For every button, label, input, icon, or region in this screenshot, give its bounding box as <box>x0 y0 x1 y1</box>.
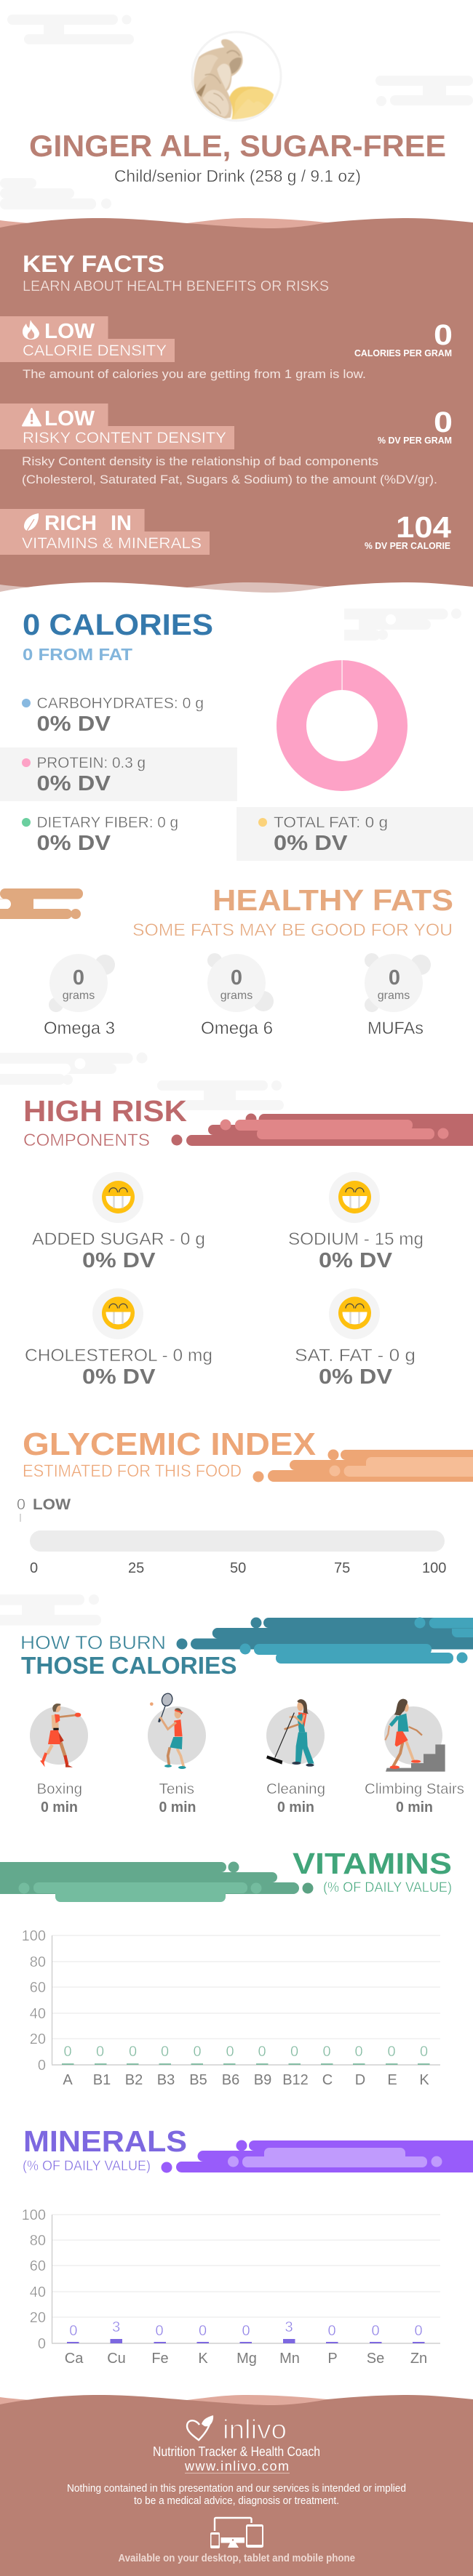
fact: calorie density: LOW <box>44 320 95 343</box>
icon: inlivo heart logo <box>187 2415 213 2440</box>
food photo: ginger root <box>192 32 281 121</box>
bar chart: vitamins: 0 <box>258 2044 266 2060</box>
nutrient: dietary fiber: 0% DV <box>36 832 111 855</box>
bar chart: vitamins: B6 <box>222 2072 239 2088</box>
risk: sodium: SODIUM - 15 mg <box>288 1229 424 1249</box>
risk: added sugar <box>32 1172 205 1272</box>
fact: risky content density <box>0 404 453 486</box>
bar chart: vitamins: 0 <box>226 2044 234 2060</box>
website link: www.inlivo.com <box>184 2459 289 2473</box>
heading: key facts: KEY FACTS <box>23 251 164 277</box>
decorative cloud: burn <box>0 1594 101 1626</box>
bar chart: minerals: 0 <box>327 2323 336 2339</box>
bar chart: vitamins: 0 <box>290 2044 298 2060</box>
risk: cholesterol <box>25 1288 212 1389</box>
fact: calorie density: CALORIES PER GRAM <box>354 348 452 358</box>
disclaimer: Nothing contained in this presentation and our services is intended or implied <box>67 2482 406 2495</box>
risk: saturated fat: SAT. FAT - 0 g <box>295 1346 416 1365</box>
bar chart: vitamins: B1 <box>93 2072 111 2088</box>
activity: climbing stairs: 0 min <box>396 1799 433 1815</box>
disclaimer <box>67 2482 406 2507</box>
fact: rich in vitamins and minerals: 104 <box>396 510 451 544</box>
bar chart: vitamins: 100 <box>22 1928 46 1944</box>
bar chart: vitamins: 0 <box>161 2044 169 2060</box>
illustration: person climbing stairs <box>385 1699 445 1772</box>
bar chart: vitamins: B5 <box>189 2072 207 2088</box>
bar chart: minerals <box>22 2207 440 2367</box>
fact: calorie density: CALORIE DENSITY <box>23 342 167 359</box>
fact: risky content density: RISKY CONTENT DENSITY <box>23 430 226 446</box>
heading: those calories: THOSE CALORIES <box>21 1652 237 1679</box>
nutrient: protein: 0% DV <box>36 772 111 795</box>
tagline: Nutrition Tracker & Health Coach <box>153 2444 320 2459</box>
bar chart: vitamins: B9 <box>254 2072 271 2088</box>
fat: omega 3 <box>44 954 115 1038</box>
bar chart: vitamins: 40 <box>30 2006 46 2022</box>
fat: omega 3: grams <box>63 990 95 1002</box>
bar chart: vitamins: B2 <box>125 2072 143 2088</box>
activity: tennis: 0 min <box>159 1799 196 1815</box>
fact: rich in vitamins and minerals: RICH <box>44 512 97 535</box>
icon: leaf <box>24 513 39 531</box>
decorative bars: minerals <box>162 2140 473 2172</box>
activity: cleaning: Cleaning <box>266 1781 325 1797</box>
title: GINGER ALE, SUGAR-FREE <box>29 129 446 163</box>
icon: smiley <box>338 1297 371 1329</box>
activity: cleaning <box>266 1699 325 1815</box>
fact: rich in vitamins and minerals: % DV PER CALORIE <box>365 540 450 551</box>
bar chart: minerals: Zn <box>410 2351 427 2367</box>
bar chart: vitamins: C <box>322 2072 333 2088</box>
subheading: components: COMPONENTS <box>23 1131 150 1150</box>
glycemic gauge: 25 <box>128 1560 144 1576</box>
bar chart: vitamins: 0 <box>63 2044 72 2060</box>
nutrient: protein: PROTEIN: 0.3 g <box>36 755 146 771</box>
activity: boxing: Boxing <box>36 1781 82 1797</box>
subheading: minerals: (% OF DAILY VALUE) <box>23 2159 151 2174</box>
bar chart: minerals: 0 <box>371 2323 380 2339</box>
heading: high risk: HIGH RISK <box>23 1094 187 1128</box>
fact: risky content density: Risky Content density is the relationship of bad components <box>22 454 378 468</box>
subheading: glycemic index: ESTIMATED FOR THIS FOOD <box>23 1461 242 1481</box>
heading: glycemic index: GLYCEMIC INDEX <box>23 1427 316 1462</box>
fact: rich in vitamins and minerals <box>0 509 451 555</box>
risk: sodium: 0% DV <box>319 1249 393 1272</box>
heading: minerals: MINERALS <box>23 2124 187 2158</box>
subheading: healthy fats: SOME FATS MAY BE GOOD FOR YOU <box>132 920 453 940</box>
decorative bars: high risk <box>172 1114 473 1146</box>
bar chart: vitamins: 0 <box>354 2044 363 2060</box>
decorative bars: vitamins <box>0 1861 313 1902</box>
fact: calorie density: The amount of calories you are getting from 1 gram is low. <box>23 367 366 381</box>
fat: omega 6 <box>201 953 274 1038</box>
fact: rich in vitamins and minerals: IN <box>111 512 132 535</box>
nutrient: dietary fiber <box>22 814 178 855</box>
fat: omega 3: Omega 3 <box>44 1019 115 1038</box>
illustration: boxer <box>40 1704 81 1768</box>
bar chart: minerals: Cu <box>107 2351 126 2367</box>
bar chart: minerals: Mn <box>279 2351 300 2367</box>
bar chart: minerals: 0 <box>38 2336 46 2352</box>
panel: footer <box>0 2395 473 2576</box>
bar chart: vitamins: D <box>355 2072 365 2088</box>
fat: omega 6: 0 <box>231 966 242 990</box>
bar chart: vitamins: 0 <box>129 2044 137 2060</box>
donut chart <box>291 660 393 777</box>
activity: tennis <box>148 1692 206 1815</box>
bar chart: vitamins: K <box>419 2072 429 2088</box>
bar chart: vitamins: 0 <box>96 2044 104 2060</box>
risk: cholesterol: 0% DV <box>82 1365 156 1389</box>
bar chart: minerals: 0 <box>155 2323 164 2339</box>
bar chart: minerals: Ca <box>65 2351 84 2367</box>
fact: calorie density: 0 <box>434 319 453 351</box>
activity: cleaning: 0 min <box>277 1799 314 1815</box>
decorative clouds: high risk <box>0 1053 284 1110</box>
icon: smiley <box>102 1297 135 1329</box>
fact: risky content density: 0 <box>434 406 453 438</box>
activity: climbing stairs <box>365 1699 464 1815</box>
bar chart: vitamins: 80 <box>30 1954 46 1970</box>
fat: mufas: MUFAs <box>367 1019 424 1038</box>
bar chart: vitamins: 0 <box>387 2044 396 2060</box>
bar chart: minerals: Mg <box>236 2351 257 2367</box>
bar chart: minerals: 3 <box>112 2319 120 2335</box>
bar chart: minerals: 20 <box>30 2310 46 2326</box>
fact: rich in vitamins and minerals: VITAMINS & MINERALS <box>22 535 202 552</box>
subheading: vitamins: (% OF DAILY VALUE) <box>323 1880 452 1895</box>
icon: smiley <box>338 1181 371 1213</box>
bar chart: minerals: Fe <box>151 2351 169 2367</box>
nutrient: carbohydrates: CARBOHYDRATES: 0 g <box>36 695 204 712</box>
bar chart: minerals: 40 <box>30 2284 46 2300</box>
bar chart: vitamins: B3 <box>157 2072 175 2088</box>
decorative bars: burn <box>176 1617 473 1664</box>
fact: calorie density <box>0 316 453 381</box>
activity: tennis: Tenis <box>159 1781 194 1797</box>
risk: added sugar: 0% DV <box>82 1249 156 1272</box>
glycemic gauge: LOW <box>33 1496 71 1513</box>
bar chart: minerals: 0 <box>69 2323 77 2339</box>
bar chart: vitamins: 0 <box>193 2044 202 2060</box>
heading: how to burn: HOW TO BURN <box>20 1632 166 1653</box>
header decorative clouds <box>0 15 473 209</box>
glycemic gauge: 100 <box>422 1560 446 1576</box>
bar chart: minerals: 100 <box>22 2207 46 2223</box>
nutrient: protein <box>0 747 237 801</box>
availability note: Available on your desktop, tablet and mobile phone <box>118 2552 355 2564</box>
fat: mufas: grams <box>378 990 410 1002</box>
bar chart: vitamins: 0 <box>322 2044 331 2060</box>
nutrient: carbohydrates: 0% DV <box>36 713 111 736</box>
decorative cloud: calories <box>344 609 461 641</box>
bar chart: vitamins: 20 <box>30 2031 46 2047</box>
icon: flame <box>23 320 39 340</box>
glycemic gauge <box>17 1496 446 1576</box>
nutrient: dietary fiber: DIETARY FIBER: 0 g <box>36 814 178 831</box>
decorative bars: glycemic index <box>253 1450 473 1482</box>
bar chart: minerals: Se <box>367 2351 384 2367</box>
brand name: inlivo <box>223 2415 287 2444</box>
heading: 0 calories: 0 CALORIES <box>23 608 213 641</box>
bar chart: vitamins: A <box>63 2072 73 2088</box>
glycemic gauge: 0 <box>30 1560 38 1576</box>
activity: climbing stairs: Climbing Stairs <box>365 1781 464 1797</box>
nutrient: carbohydrates <box>22 695 204 736</box>
risk: cholesterol: CHOLESTEROL - 0 mg <box>25 1346 212 1365</box>
subtitle: Child/senior Drink (258 g / 9.1 oz) <box>114 166 361 185</box>
subheading: 0 from fat: 0 FROM FAT <box>23 645 132 664</box>
decorative cloud: healthy fats <box>0 888 83 919</box>
subheading: key facts: LEARN ABOUT HEALTH BENEFITS OR RISKS <box>23 278 329 294</box>
nutrient: total fat: 0% DV <box>274 832 348 855</box>
bar chart: minerals: 0 <box>199 2323 207 2339</box>
risk: saturated fat: 0% DV <box>319 1365 393 1389</box>
bar chart: minerals: 80 <box>30 2233 46 2249</box>
bar chart: minerals: K <box>198 2351 208 2367</box>
bar chart: vitamins: 60 <box>30 1980 46 1996</box>
risk: saturated fat <box>295 1288 416 1389</box>
fat: mufas: 0 <box>389 966 400 990</box>
fact: risky content density: LOW <box>44 407 95 430</box>
nutrient: total fat: TOTAL FAT: 0 g <box>274 814 388 831</box>
panel: key facts <box>0 218 473 611</box>
heading: healthy fats: HEALTHY FATS <box>212 883 453 917</box>
risk: added sugar: ADDED SUGAR - 0 g <box>32 1229 205 1249</box>
bar chart: minerals: P <box>327 2351 338 2367</box>
bar chart: vitamins: 0 <box>38 2058 46 2074</box>
fat: omega 6: grams <box>220 990 253 1002</box>
disclaimer: to be a medical advice, diagnosis or treatment. <box>134 2495 339 2507</box>
bar chart: vitamins: B12 <box>282 2072 309 2088</box>
bar chart: vitamins: E <box>387 2072 397 2088</box>
activity: boxing <box>30 1704 88 1815</box>
risk: sodium <box>288 1172 424 1272</box>
bar chart: minerals: 0 <box>414 2323 423 2339</box>
glycemic gauge: 0 <box>17 1496 25 1513</box>
bar chart: vitamins: 0 <box>420 2044 428 2060</box>
bar chart: vitamins <box>22 1928 440 2088</box>
icon: smiley <box>102 1181 135 1213</box>
bar chart: minerals: 60 <box>30 2258 46 2274</box>
activity: boxing: 0 min <box>41 1799 78 1815</box>
fat: omega 6: Omega 6 <box>201 1019 273 1038</box>
icon: warning triangle <box>23 409 41 426</box>
nutrient: total fat <box>236 807 473 861</box>
heading: vitamins: VITAMINS <box>293 1847 452 1880</box>
bar chart: minerals: 3 <box>285 2319 293 2335</box>
glycemic gauge: 75 <box>334 1560 350 1576</box>
icon: devices <box>210 2518 263 2548</box>
illustration: person sweeping <box>266 1699 314 1767</box>
fat: mufas <box>365 953 431 1038</box>
fact: risky content density: % DV PER GRAM <box>378 435 452 446</box>
glycemic gauge: 50 <box>230 1560 246 1576</box>
fact: risky content density: (Cholesterol, Saturated Fat, Sugars & Sodium) to the amount (%DV/gr). <box>22 473 437 486</box>
bar chart: minerals: 0 <box>242 2323 250 2339</box>
illustration: tennis player <box>150 1692 186 1769</box>
fat: omega 3: 0 <box>73 966 84 990</box>
